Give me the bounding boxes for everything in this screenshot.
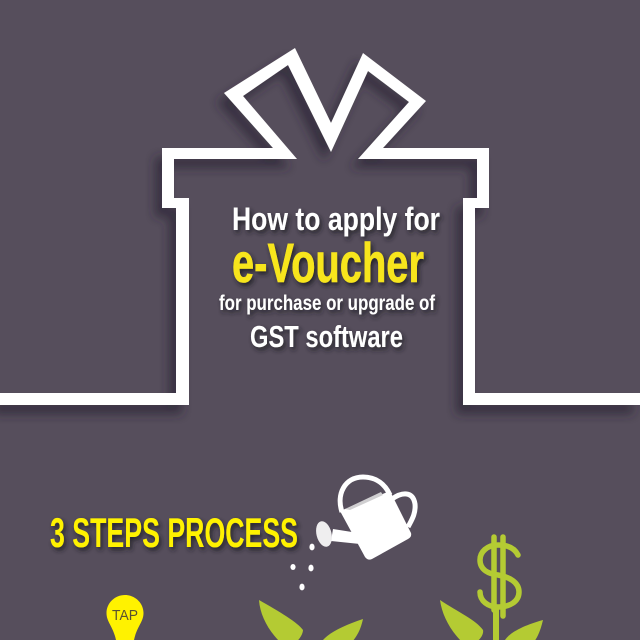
sprout left leaf <box>259 600 303 640</box>
dollar sign <box>480 537 519 616</box>
bulb label: TAP <box>112 607 138 624</box>
title line: GST software: GST software <box>250 319 403 354</box>
can body <box>340 491 411 560</box>
can spout <box>331 529 360 544</box>
dollar bars <box>494 537 503 616</box>
heading: 3 steps process: 3 STEPS PROCESS <box>50 509 298 556</box>
water drop 4 <box>299 584 305 590</box>
water drop 2 <box>290 564 296 570</box>
plant stem <box>493 606 499 640</box>
can opening highlight <box>345 492 383 510</box>
water drops <box>290 544 315 590</box>
bulb shape <box>106 595 144 640</box>
can top handle <box>340 477 390 512</box>
title line: purchase or upgrade: for purchase or upgrade of <box>219 292 436 315</box>
title line: how to apply: How to apply for <box>232 201 440 237</box>
water drop 3 <box>308 565 314 571</box>
title text <box>219 201 440 354</box>
plant right leaf <box>505 620 543 640</box>
sprout right leaf <box>323 619 363 640</box>
icon: watering can <box>290 477 415 590</box>
icon: sprout <box>259 600 363 640</box>
can side handle <box>392 494 415 527</box>
gift box outline <box>0 48 640 405</box>
can rose <box>314 520 334 548</box>
plant left leaf <box>440 600 483 640</box>
dollar S curve <box>480 545 519 607</box>
water drop 1 <box>309 544 315 550</box>
icon: dollar plant <box>440 537 543 640</box>
icon: light bulb <box>106 595 144 640</box>
title line: e-Voucher: e-Voucher <box>232 231 424 294</box>
